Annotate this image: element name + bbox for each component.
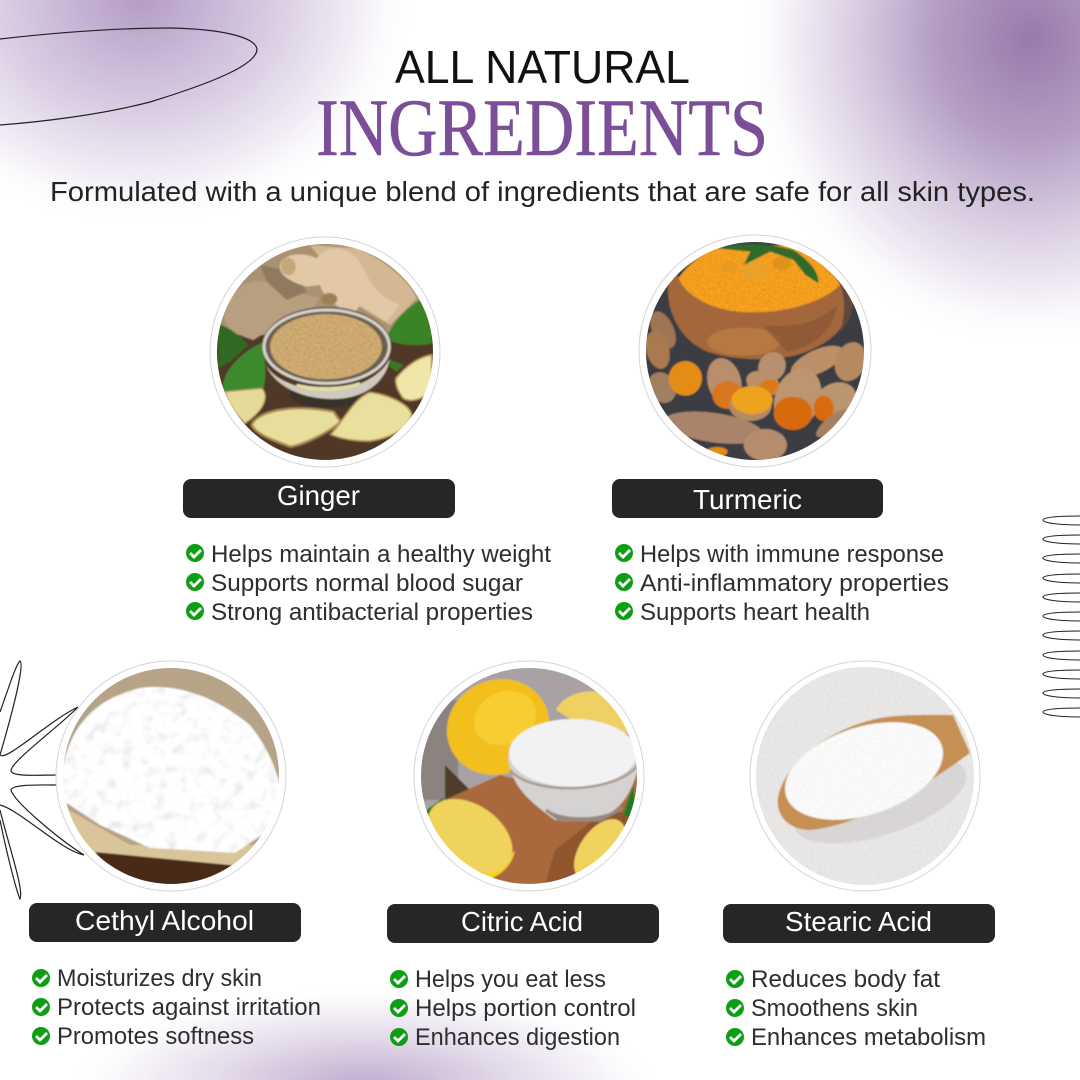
list: citric acid benefits: Enhances digestion <box>415 1024 620 1051</box>
label: cethyl alcohol: Cethyl Alcohol <box>75 905 254 936</box>
label: turmeric: Turmeric <box>693 484 802 515</box>
list: cethyl alcohol benefits: Protects against irritation <box>57 994 321 1021</box>
label: ginger: Ginger <box>277 480 360 511</box>
label: citric acid <box>387 904 659 943</box>
list: stearic acid benefits: Reduces body fat <box>751 966 940 993</box>
list: stearic acid benefits <box>726 966 986 1051</box>
label: cethyl alcohol <box>29 903 301 942</box>
list: ginger benefits <box>186 541 551 626</box>
panel: ginger <box>183 235 551 626</box>
list: cethyl alcohol benefits <box>32 965 321 1050</box>
list: turmeric benefits <box>615 541 949 626</box>
image: cethyl alcohol <box>56 661 286 891</box>
decorative spring coil <box>1043 516 1080 717</box>
list: cethyl alcohol benefits: Moisturizes dry skin <box>57 965 262 992</box>
panel: citric acid <box>387 661 659 1051</box>
list: citric acid benefits <box>390 966 636 1051</box>
label: ginger <box>183 479 455 518</box>
list: turmeric benefits: Anti-inflammatory properties <box>640 570 949 597</box>
heading: ingredients: INGREDIENTS <box>316 82 768 173</box>
decorative starfish outline <box>0 661 84 899</box>
list: ginger benefits: Strong antibacterial properties <box>211 599 533 626</box>
list: turmeric benefits: Helps with immune response <box>640 541 944 568</box>
list: cethyl alcohol benefits: Promotes softness <box>57 1023 254 1050</box>
image: ginger <box>210 235 445 470</box>
list: stearic acid benefits: Enhances metabolism <box>751 1024 986 1051</box>
list: citric acid benefits: Helps you eat less <box>415 966 606 993</box>
list: turmeric benefits: Supports heart health <box>640 599 870 626</box>
list: ginger benefits: Supports normal blood sugar <box>211 570 523 597</box>
label: turmeric <box>612 479 883 518</box>
label: citric acid: Citric Acid <box>461 906 583 937</box>
label: stearic acid <box>723 904 995 943</box>
title: all natural: ALL NATURAL <box>395 41 690 93</box>
image: citric acid <box>414 661 644 891</box>
panel: turmeric <box>612 235 949 626</box>
list: citric acid benefits: Helps portion control <box>415 995 636 1022</box>
image: stearic acid <box>750 661 980 891</box>
panel: cethyl alcohol <box>29 661 321 1050</box>
list: stearic acid benefits: Smoothens skin <box>751 995 918 1022</box>
image: turmeric <box>637 235 872 470</box>
list: ginger benefits: Helps maintain a healthy weight <box>211 541 551 568</box>
panel: stearic acid <box>723 661 995 1051</box>
label: stearic acid: Stearic Acid <box>785 906 932 937</box>
subtitle: Formulated with a unique blend of ingredients that are safe for all skin types. <box>50 176 1035 207</box>
decorative outline ellipse <box>0 28 257 125</box>
